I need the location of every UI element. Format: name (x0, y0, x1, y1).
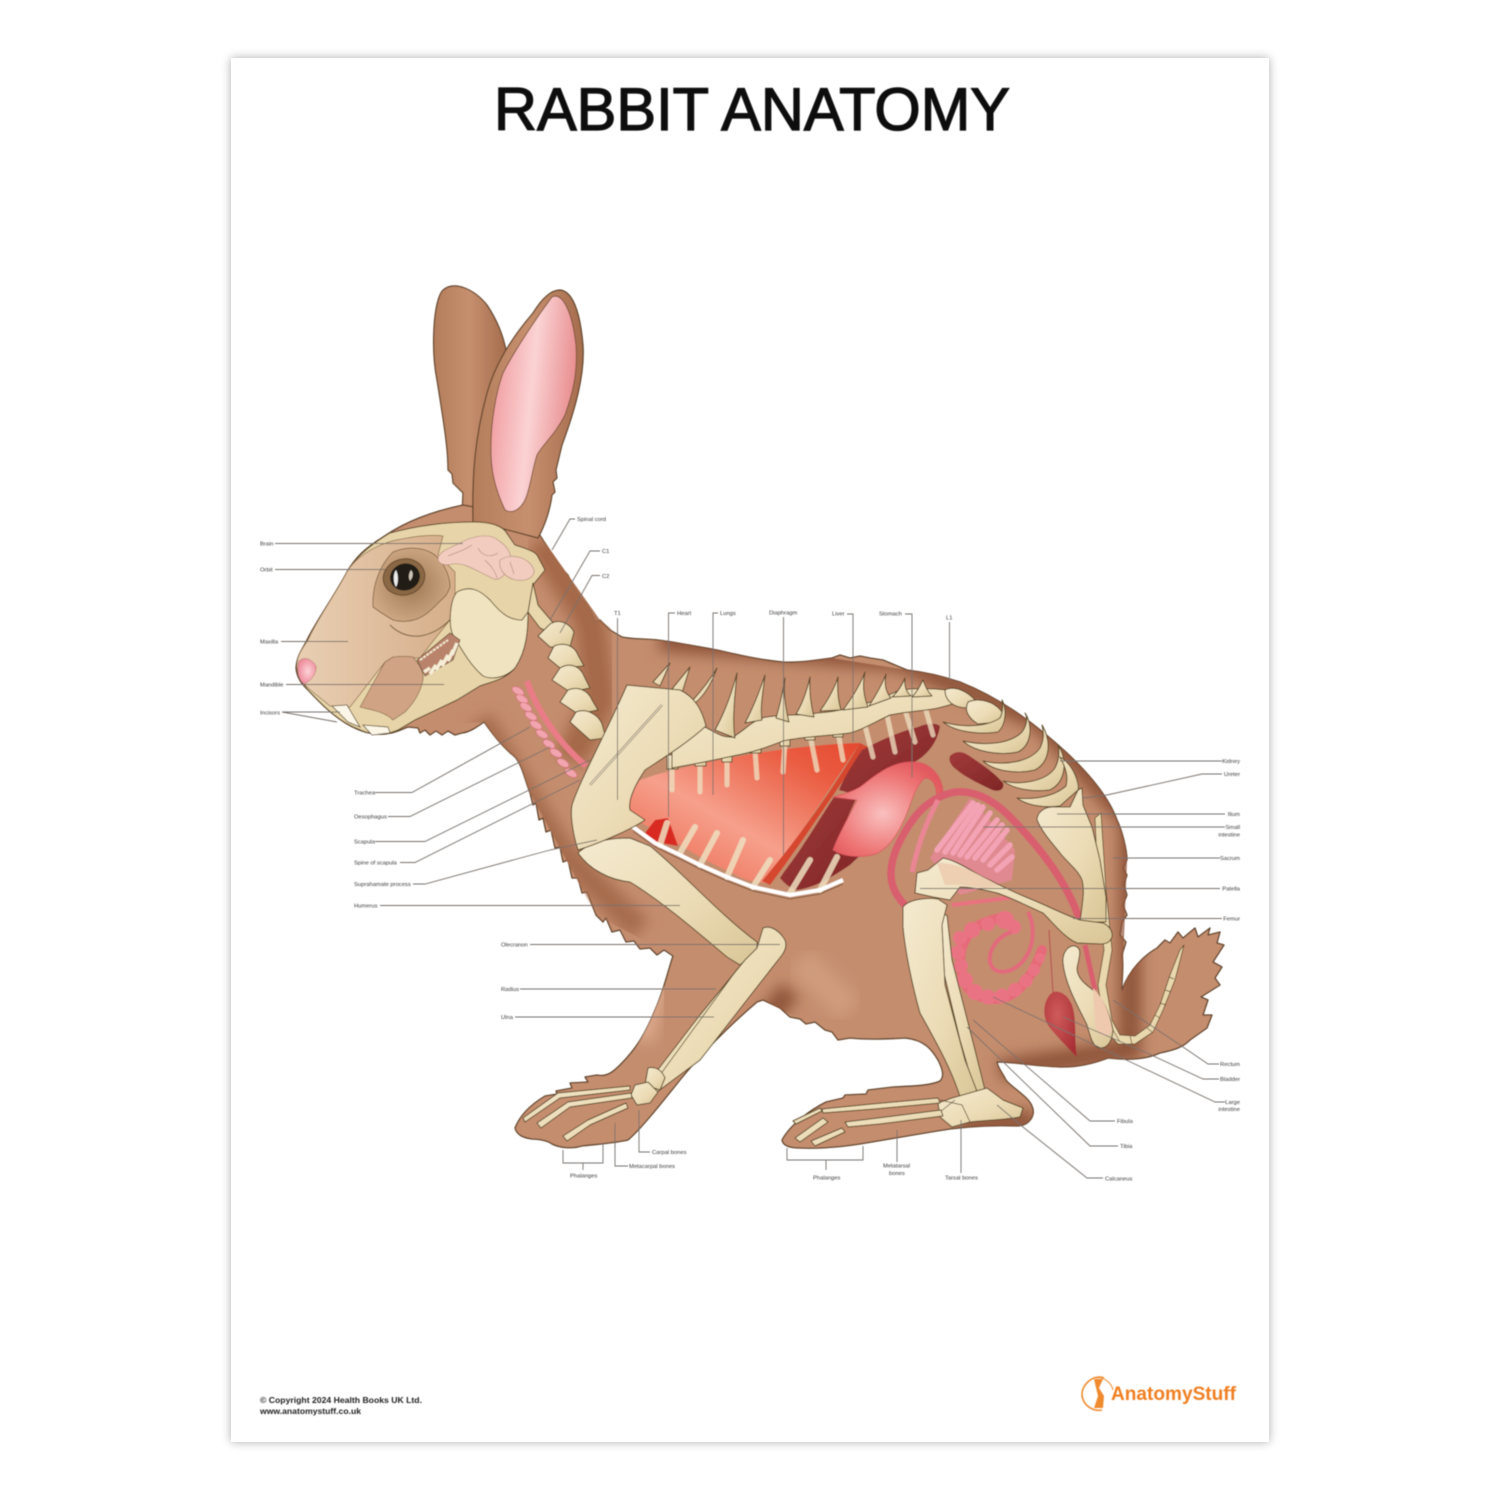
label: Trachea: Trachea (354, 790, 376, 796)
label: Spinal cord: Spinal cord (577, 517, 606, 523)
label: C1: C1 (602, 549, 609, 555)
pelvis pink overlay (1093, 988, 1112, 1036)
label: Spinal cord (552, 517, 606, 550)
spine of scapula (590, 705, 662, 785)
liver upper lobe (839, 724, 940, 796)
label: Ilium: Ilium (1228, 812, 1240, 818)
label: Oesophagus: Oesophagus (354, 814, 387, 820)
label: Rectum: Rectum (1220, 1062, 1240, 1068)
top labels (550, 517, 952, 855)
label: Spine of scapula: Spine of scapula (354, 860, 398, 866)
label: Phalanges fore (563, 1143, 603, 1180)
label: Scapula: Scapula (354, 840, 376, 846)
mandible ramus (450, 589, 528, 678)
rectum tube (1085, 945, 1095, 990)
sternum (633, 827, 843, 895)
ischium (1063, 946, 1113, 1048)
tarsal bones (938, 1088, 1023, 1127)
label: Kidney: Kidney (1222, 759, 1240, 765)
oesophagus (527, 681, 586, 766)
label: Stomach: Stomach (879, 612, 902, 618)
label: Liver: Liver (832, 612, 845, 618)
front ear (473, 290, 583, 538)
label: Metatarsal bones (883, 1130, 910, 1177)
label: Rectum (1113, 1000, 1240, 1068)
label: L1: L1 (946, 616, 952, 622)
zygomatic arch (390, 618, 452, 636)
right labels (920, 759, 1241, 1113)
diaphragm (762, 743, 868, 885)
back ear (434, 286, 506, 512)
label: Maxilla (260, 640, 348, 646)
label: Small intestine: Small (1226, 825, 1240, 831)
label: Radius: Radius (501, 987, 519, 993)
maxilla (297, 535, 455, 707)
thoracic vertebral column (672, 688, 962, 768)
orbit (373, 548, 450, 621)
tibia (903, 898, 978, 1097)
label: Oesophagus (354, 747, 550, 820)
title: RABBIT ANATOMY (494, 76, 1010, 143)
label: Maxilla: Maxilla (260, 640, 279, 646)
label: Bladder: Bladder (1220, 1077, 1240, 1083)
label: Scapula (354, 760, 590, 846)
label: Small intestine: intestine (1218, 832, 1240, 838)
label: Sacrum: Sacrum (1220, 856, 1240, 862)
label: Trachea (354, 727, 530, 796)
femur (915, 858, 1112, 944)
skull (297, 522, 1184, 1146)
scapula (571, 685, 706, 850)
label: Ureter (1083, 772, 1240, 798)
ribs (672, 707, 933, 792)
body silhouette (296, 505, 1224, 1148)
label: Tibia (967, 1027, 1133, 1150)
label: Fibula (973, 1020, 1134, 1125)
label: Phalanges fore: Phalanges (570, 1174, 597, 1180)
logo: AnatomyStuff: AnatomyStuff (1111, 1384, 1237, 1405)
copyright: © Copyright 2024 Health Books UK Ltd. (260, 1396, 422, 1405)
label: Spine of scapula (354, 780, 580, 866)
heart (645, 818, 678, 846)
label: Sacrum (1113, 856, 1240, 862)
label: Brain: Brain (260, 542, 274, 548)
label: Phalanges hind: Phalanges (813, 1176, 840, 1182)
humerus (578, 838, 757, 965)
label: Mandible: Mandible (260, 682, 284, 688)
label: Humerus: Humerus (354, 904, 378, 910)
label: Metacarpal bones (615, 1123, 675, 1170)
copyright: www.anatomystuff.co.uk (259, 1407, 362, 1416)
thoracic spinous processes (653, 663, 932, 738)
trachea (511, 685, 578, 779)
poster sheet (231, 58, 1269, 1442)
left labels (260, 542, 780, 1021)
label: Bladder (1063, 1017, 1240, 1083)
label: Olecranon: Olecranon (501, 942, 528, 948)
label: Tibia: Tibia (1120, 1144, 1133, 1150)
fibula (937, 915, 985, 1092)
nose (298, 659, 316, 684)
rib heads (667, 711, 869, 769)
lumbar vertebrae (943, 688, 1078, 807)
small intestine folds (930, 798, 1015, 895)
rabbit illustration (259, 76, 1241, 1416)
label: L1 (946, 616, 952, 680)
label: Orbit (260, 568, 385, 574)
copyright (259, 1396, 422, 1416)
lower incisor (363, 725, 390, 735)
label: T1: T1 (614, 611, 621, 617)
label: Suprahamate process (354, 840, 597, 888)
label: Phalanges hind (787, 1146, 863, 1182)
body shading (480, 540, 1130, 1180)
label: Calcaneus (997, 1105, 1132, 1182)
label: Metatarsal bones: bones (889, 1171, 905, 1177)
label: Lungs (713, 611, 736, 795)
liver lower lobe (780, 796, 860, 890)
caecum loop tube (891, 792, 1078, 915)
bottom labels (563, 1020, 1134, 1182)
label: Stomach (879, 612, 912, 778)
label: C1 (550, 549, 609, 620)
label: Orbit: Orbit (260, 568, 273, 574)
label: Fibula: Fibula (1117, 1119, 1134, 1125)
label: Carpal bones: Carpal bones (652, 1150, 687, 1156)
label: Femur: Femur (1223, 916, 1240, 922)
label: Incisors: Incisors (260, 710, 280, 716)
label: Large intestine: intestine (1218, 1107, 1240, 1113)
label: Tarsal bones (945, 1120, 978, 1182)
label: Tarsal bones: Tarsal bones (945, 1176, 978, 1182)
label: Ureter: Ureter (1224, 772, 1240, 778)
inner ear (491, 296, 576, 512)
label: Large intestine (993, 997, 1240, 1113)
label: C2 (560, 574, 609, 633)
cervical spine (528, 583, 606, 740)
hind foot bones (793, 1098, 943, 1146)
label: C2: C2 (602, 574, 609, 580)
label: Heart (668, 611, 692, 817)
icon: logo ring with figure (1082, 1377, 1113, 1410)
sacrum and tail vertebrae (1095, 813, 1184, 1044)
radius and ulna (650, 927, 786, 1092)
molar teeth (417, 633, 460, 676)
label: Small intestine (983, 825, 1240, 838)
upper incisor (332, 705, 360, 727)
kidney (949, 752, 1003, 791)
label: Incisors (260, 710, 340, 722)
label: Suprahamate process: Suprahamate process (354, 882, 411, 888)
label: Lungs: Lungs (720, 611, 736, 617)
label: Metatarsal bones: Metatarsal (883, 1164, 910, 1170)
label: Carpal bones (639, 1110, 687, 1156)
label: Large intestine: Large (1225, 1100, 1240, 1106)
carpal bones (631, 1067, 665, 1105)
label: Calcaneus: Calcaneus (1105, 1176, 1132, 1182)
lungs (615, 743, 860, 883)
ilium (1037, 788, 1106, 922)
logo: AnatomyStuff (1082, 1377, 1237, 1410)
label: Liver (832, 612, 853, 742)
label: Diaphragm: Diaphragm (769, 610, 798, 616)
label: Ulna: Ulna (501, 1015, 514, 1021)
fore foot bones (523, 1086, 632, 1141)
mandible patch (360, 656, 423, 720)
stomach (833, 762, 943, 856)
label: Patella: Patella (1222, 886, 1241, 892)
label: Heart: Heart (677, 611, 692, 617)
costal cartilages (660, 823, 837, 893)
bladder (1044, 992, 1077, 1057)
eye (379, 554, 429, 600)
label: Metacarpal bones: Metacarpal bones (629, 1164, 675, 1170)
brain (438, 536, 534, 580)
large intestine (951, 897, 1045, 1004)
